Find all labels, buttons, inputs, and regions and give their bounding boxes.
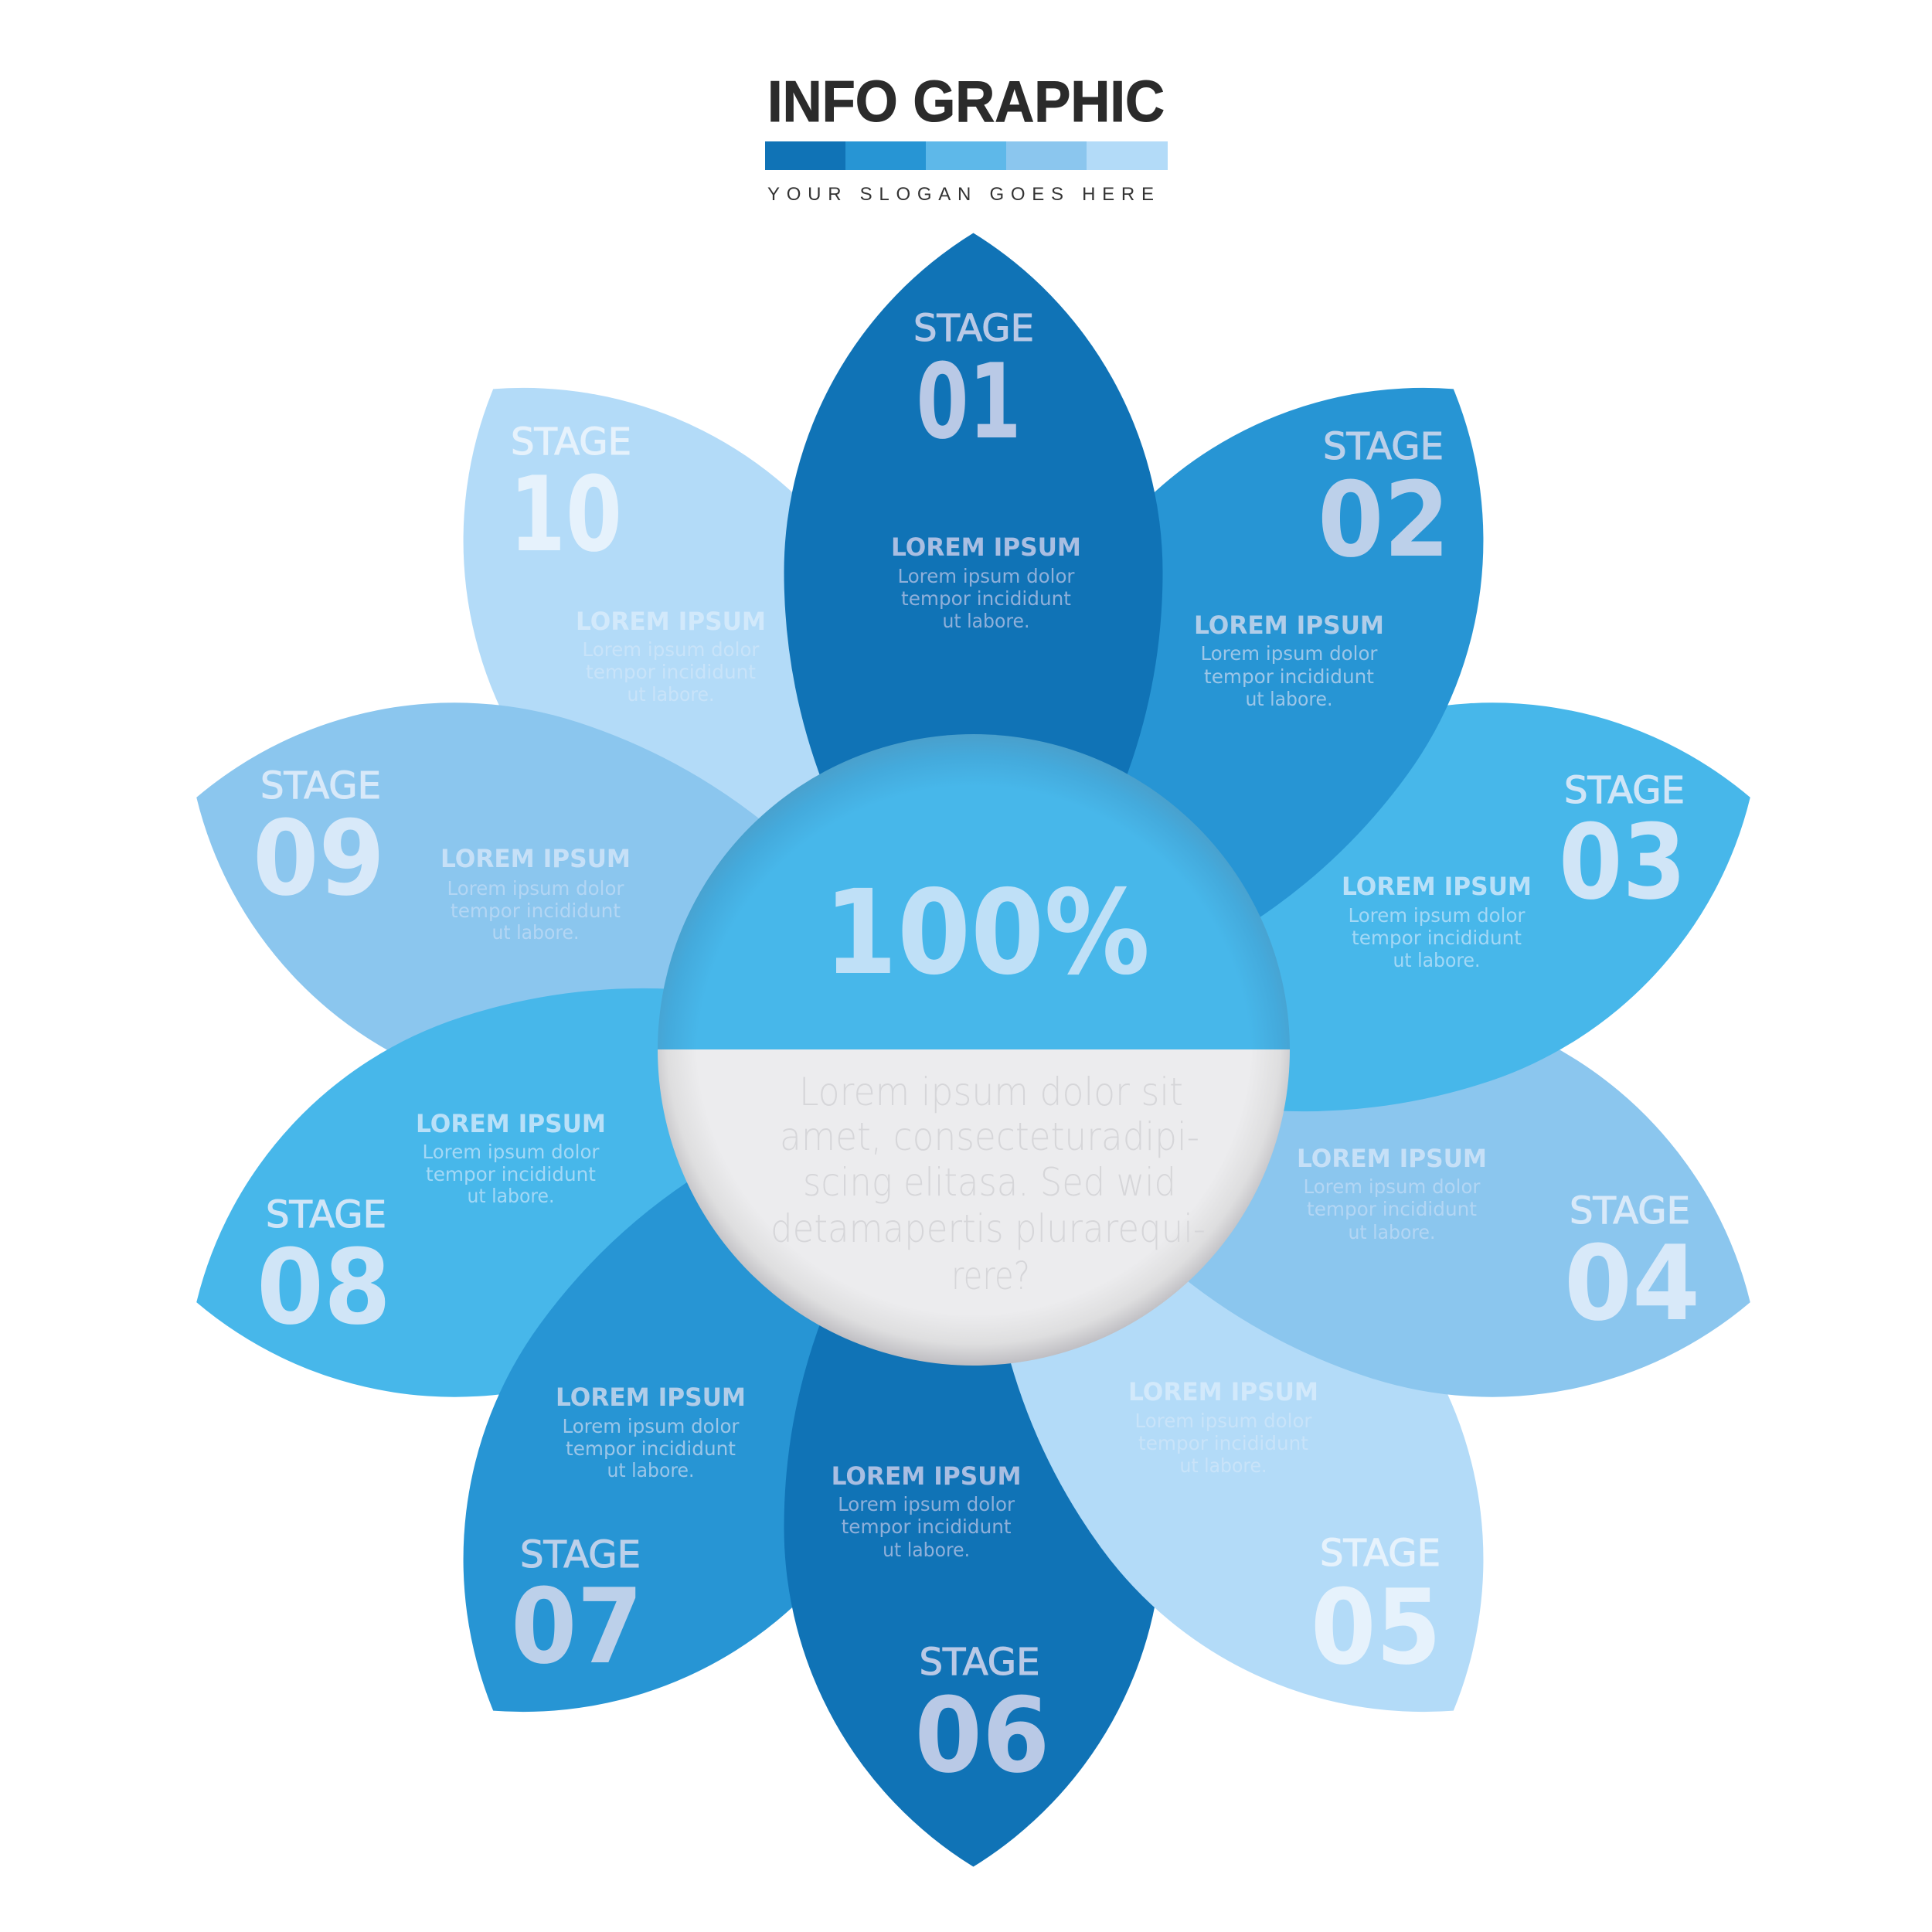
panel: stage 03 [988, 617, 1808, 1206]
panel: centre circle [658, 734, 1290, 1366]
stage 03 text: Lorem ipsum dolor [1348, 904, 1526, 927]
panel: stage 08 [138, 893, 958, 1482]
stage 05 label: STAGE [1320, 1532, 1440, 1575]
stage 06 text: Lorem ipsum dolor [838, 1493, 1015, 1515]
panel: stage 10 [340, 277, 1081, 1099]
stage 03 text: LOREM IPSUM [1342, 872, 1532, 901]
stage 10 text: Lorem ipsum dolor [583, 638, 760, 661]
stage 04 text: tempor incididunt [1307, 1198, 1477, 1220]
stage 02 text [1194, 611, 1384, 710]
stage 10 text: tempor incididunt [586, 661, 756, 683]
stage 08 text: Lorem ipsum dolor [422, 1141, 600, 1163]
stage 01 text: tempor incididunt [901, 587, 1071, 610]
stage 05 text: ut labore. [1179, 1454, 1267, 1477]
stage 06 label: STAGE [920, 1641, 1040, 1684]
petal 03 [988, 617, 1808, 1206]
stage 01 text [891, 532, 1081, 632]
stage 01 label: 01 [917, 342, 1022, 462]
stage 04 text [1297, 1144, 1487, 1243]
title block [765, 69, 1168, 205]
panel: stage 07 [340, 1001, 1081, 1822]
stage 07 text [556, 1383, 746, 1481]
stage 10 text [576, 607, 766, 706]
stage 10 text: LOREM IPSUM [576, 607, 766, 636]
stage 02 text: Lorem ipsum dolor [1201, 642, 1378, 665]
centre description [770, 1070, 1206, 1298]
stage 09 label: STAGE [260, 764, 381, 808]
stage 04 text: ut labore. [1348, 1221, 1436, 1243]
stage 07 text: ut labore. [607, 1459, 694, 1481]
stage 02 text: LOREM IPSUM [1194, 611, 1384, 640]
stage 08 text: tempor incididunt [426, 1163, 596, 1185]
stage 09 text: Lorem ipsum dolor [447, 877, 624, 900]
petal 02 [866, 277, 1607, 1099]
circle upper half [658, 734, 1290, 1050]
stage 07 text: Lorem ipsum dolor [563, 1415, 740, 1437]
slogan: YOUR SLOGAN GOES HERE [767, 184, 1154, 205]
centre description: detamapertis plurarequi- [770, 1206, 1206, 1251]
stage 03 label: STAGE [1564, 769, 1685, 812]
stage 06 text: LOREM IPSUM [832, 1461, 1022, 1491]
stage 10 label [509, 420, 631, 575]
stage 02 text: tempor incididunt [1204, 665, 1374, 688]
petal 04 [988, 893, 1808, 1482]
stage 02 label: 02 [1318, 460, 1450, 580]
panel: stage 06 [784, 1127, 1162, 1867]
stage 09 text: tempor incididunt [451, 900, 621, 922]
panel: stage 01 [784, 233, 1162, 972]
stage 07 text: LOREM IPSUM [556, 1383, 746, 1412]
stage 01 text: ut labore. [943, 610, 1029, 632]
stage 07 label: 07 [511, 1566, 643, 1687]
stage 02 label: STAGE [1323, 425, 1444, 468]
petal 07 [340, 1001, 1081, 1822]
stage 05 text: LOREM IPSUM [1128, 1377, 1318, 1406]
stage 04 label: STAGE [1570, 1189, 1690, 1233]
stage 01 label: STAGE [913, 307, 1034, 350]
petal 08 [138, 893, 958, 1482]
circle lower half [658, 1049, 1290, 1366]
stage 09 text [440, 844, 631, 944]
panel: stage 05 [866, 1001, 1607, 1822]
stage 06 text: tempor incididunt [842, 1515, 1012, 1538]
panel: stage 04 [988, 893, 1808, 1482]
big percentage: 100% [824, 865, 1150, 1001]
stage 08 text [416, 1109, 606, 1207]
stage 03 text: tempor incididunt [1352, 927, 1522, 949]
panel: stage 02 [866, 277, 1607, 1099]
centre description: amet, consecteturadipi- [780, 1114, 1199, 1159]
stage 01 label [913, 307, 1034, 462]
stage 03 text: ut labore. [1393, 949, 1481, 971]
stage 04 text: LOREM IPSUM [1297, 1144, 1487, 1173]
stage 07 label: STAGE [520, 1533, 641, 1577]
petal 01 [784, 233, 1162, 972]
stage 04 text: Lorem ipsum dolor [1303, 1175, 1481, 1198]
stage 04 label: 04 [1564, 1223, 1700, 1344]
petal 10 [340, 277, 1081, 1099]
stage 06 label: 06 [915, 1675, 1049, 1796]
stage 06 text [832, 1461, 1022, 1561]
stage 09 text: ut labore. [492, 921, 580, 944]
centre description: scing elitasa. Sed wid [803, 1160, 1176, 1205]
centre description: rere? [951, 1253, 1030, 1298]
petal 05 [866, 1001, 1607, 1822]
panel: stage 09 [138, 617, 958, 1206]
stage 01 text: Lorem ipsum dolor [898, 565, 1075, 587]
stage 05 text: Lorem ipsum dolor [1134, 1410, 1312, 1432]
stage 03 text [1342, 872, 1532, 971]
stage 10 label: STAGE [511, 420, 631, 464]
colour bar [765, 141, 1168, 170]
stage 02 text: ut labore. [1246, 688, 1332, 710]
stage 06 text: ut labore. [883, 1539, 970, 1561]
stage 10 text: ut labore. [628, 683, 714, 706]
stage 08 text: ut labore. [467, 1185, 555, 1207]
stage 07 text: tempor incididunt [566, 1437, 736, 1460]
petal 09 [138, 617, 958, 1206]
petal 06 [784, 1127, 1162, 1867]
stage 05 text [1128, 1377, 1318, 1477]
centre description: Lorem ipsum dolor sit [799, 1070, 1183, 1114]
stage 01 text: LOREM IPSUM [891, 532, 1081, 562]
stage 10 label: 10 [509, 454, 622, 575]
stage 09 label: 09 [253, 798, 385, 919]
stage 08 text: LOREM IPSUM [416, 1109, 606, 1138]
stage 09 text: LOREM IPSUM [440, 844, 631, 873]
stage 08 label: 08 [257, 1227, 391, 1348]
stage 05 label: 05 [1311, 1567, 1441, 1688]
title: INFO GRAPHIC [767, 69, 1165, 134]
stage 05 text: tempor incididunt [1138, 1432, 1308, 1454]
stage 03 label: 03 [1559, 802, 1686, 923]
stage 08 label: STAGE [266, 1193, 386, 1236]
